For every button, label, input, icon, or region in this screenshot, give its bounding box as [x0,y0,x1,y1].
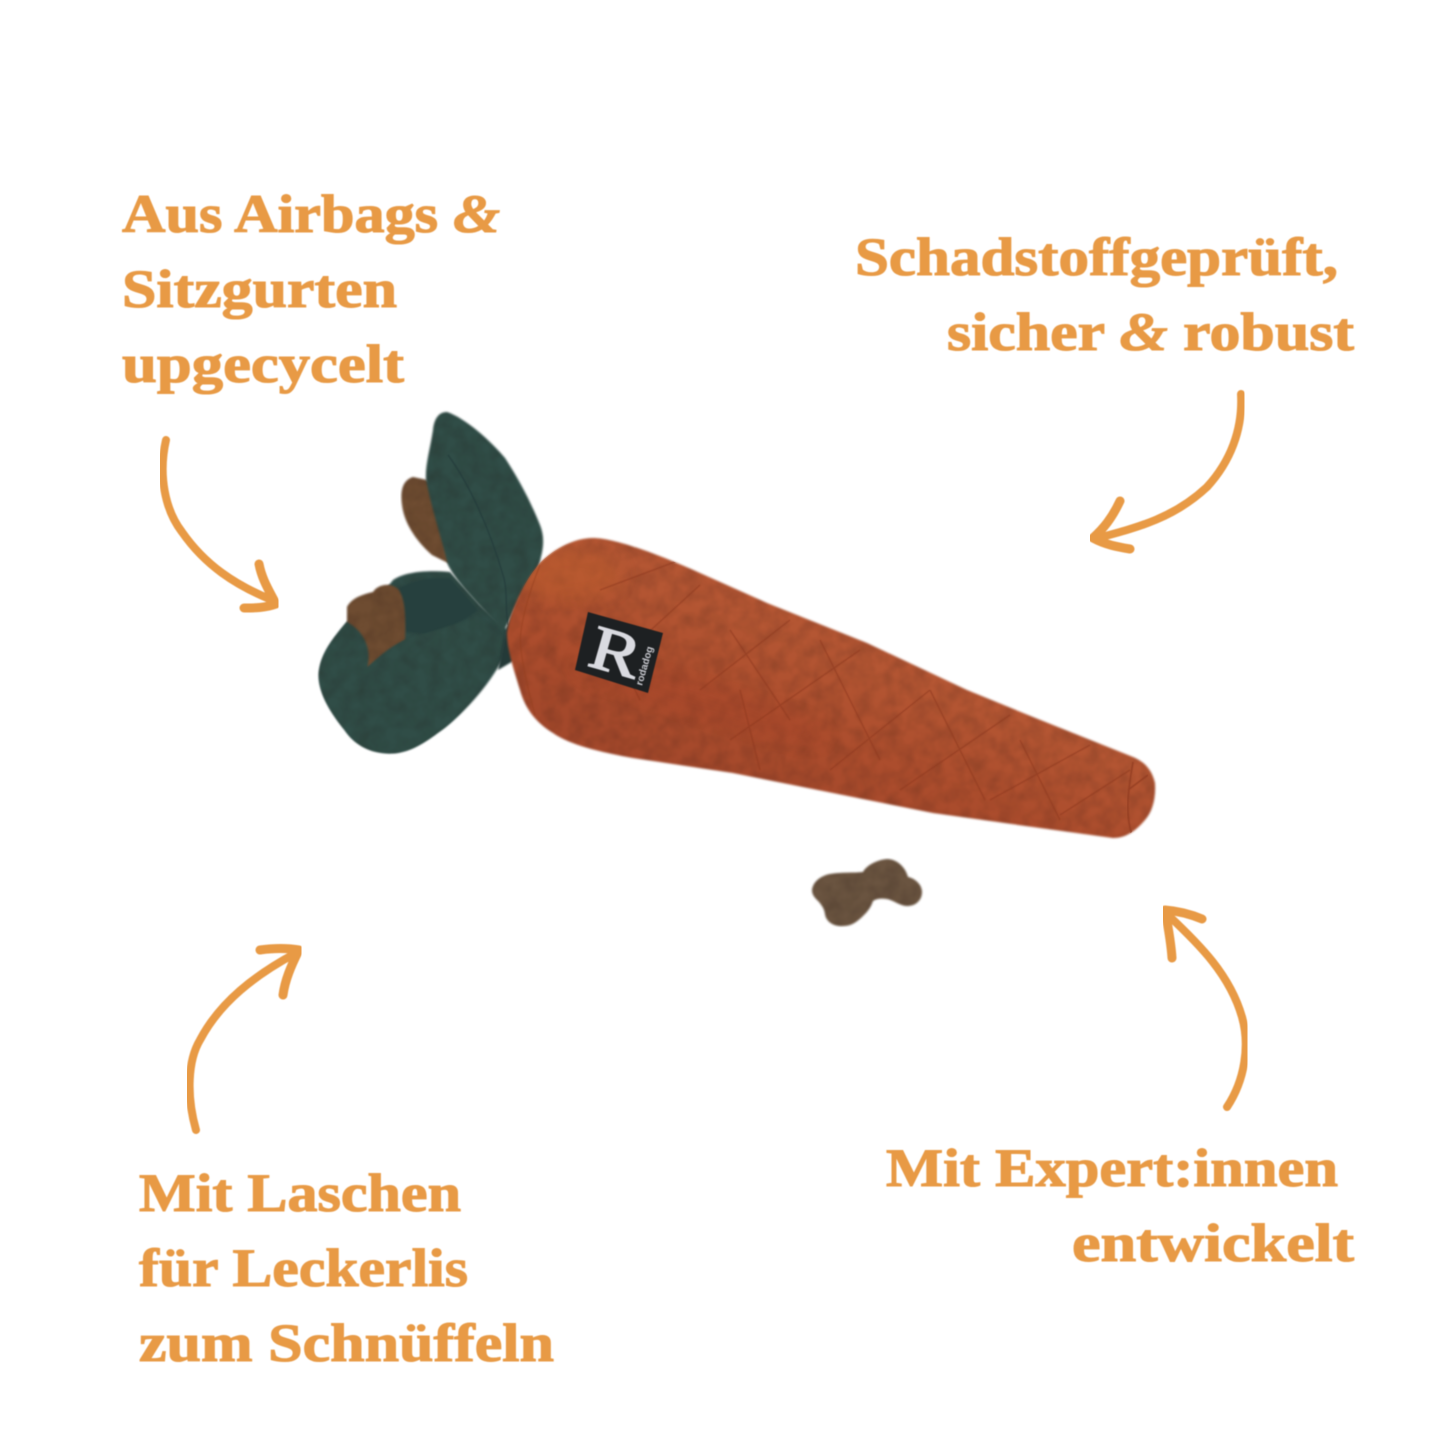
arrow: bottom left, pointing up to leaves [190,948,299,1130]
text block: with tabs for treats [139,1163,554,1373]
treat: behind upper leaf [401,477,450,564]
text block: with tabs for treats: zum Schnüffeln [139,1313,554,1373]
brand label [575,612,663,693]
carrot shading and stitching [520,549,1148,835]
product: carrot toy [319,412,1155,838]
text block: with tabs for treats: für Leckerlis [139,1238,468,1298]
text block: tested for pollutants, safe and robust [855,227,1354,362]
carrot body [507,538,1155,838]
brand label: R [582,613,650,692]
text block: with tabs for treats: Mit Laschen [139,1163,461,1223]
brand label: rodadog [634,645,656,687]
text block: upcycled from airbags and seat belts [122,184,500,394]
text block: developed with experts: Mit Expert:innen [886,1138,1338,1198]
leaf: lower inner shadow [396,578,478,634]
treat: bone biscuit on the floor [812,859,922,926]
arrow: top right, pointing to carrot [1093,394,1241,549]
leaf: upper centre fold [448,455,508,625]
leaf: lower front flap [319,616,505,753]
arrow: top left, pointing to leaves [163,440,276,608]
carrot stalk shadow [498,558,540,670]
text block: developed with experts [886,1138,1354,1273]
treat: inside lower leaf [347,585,405,668]
text block: upcycled from airbags and seat belts: Sitzgurten [122,259,397,319]
text block: developed with experts: entwickelt [1072,1213,1354,1273]
arrow: bottom right, pointing up to carrot tip [1165,910,1246,1107]
leaf: upper [426,412,543,632]
text block: tested for pollutants, safe and robust: Schadstoffgeprüft, [855,227,1338,287]
text block: upcycled from airbags and seat belts: upgecycelt [122,334,404,394]
text block: upcycled from airbags and seat belts: Aus Airbags & [122,184,500,244]
text block: tested for pollutants, safe and robust: sicher & robust [947,302,1354,362]
leaf: lower [319,571,507,753]
